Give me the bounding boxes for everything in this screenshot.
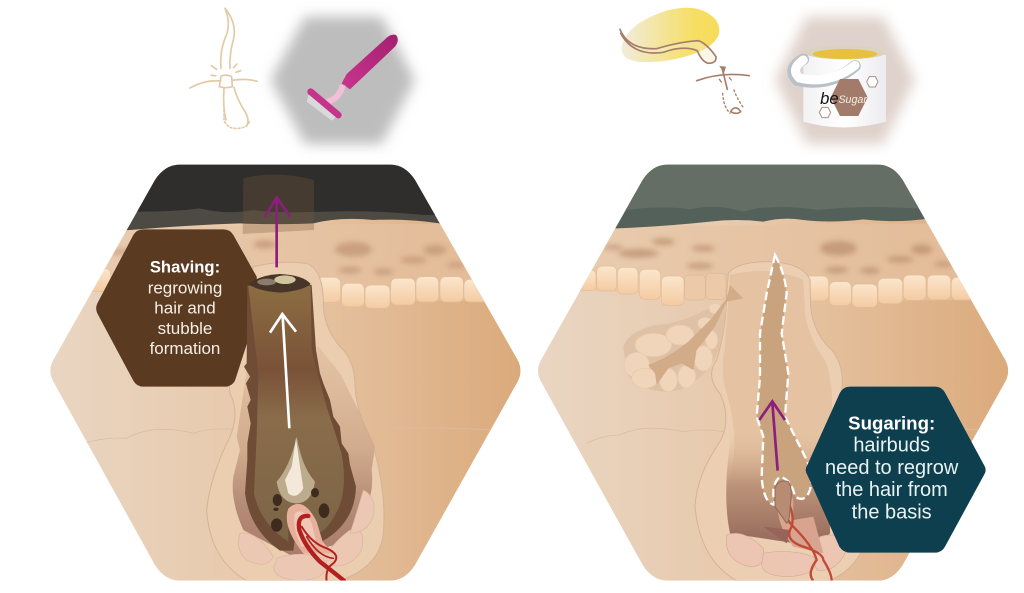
callout: sugaring: need to regrow <box>825 457 959 479</box>
callout: sugaring <box>806 387 986 553</box>
callout: shaving: stubble <box>158 319 212 338</box>
skin background <box>40 160 530 590</box>
icon: sugar paste pulling hair <box>620 8 749 113</box>
upper skin layer <box>580 223 980 302</box>
upper skin layer <box>107 223 490 302</box>
icon: cut hair <box>190 8 257 128</box>
fat lobes <box>238 490 374 581</box>
papilla remnant <box>778 496 824 554</box>
dermis boundary <box>587 428 983 443</box>
panel: shaving <box>40 160 530 590</box>
skin background <box>530 160 1020 590</box>
outer root sheath <box>233 347 375 557</box>
removed hair ghost dashed <box>757 255 811 505</box>
sebaceous gland <box>623 285 743 392</box>
faded cells <box>685 273 726 300</box>
callout: sugaring: hairbuds <box>853 435 930 457</box>
callout: shaving: Shaving: <box>150 258 220 277</box>
hair matrix <box>277 437 315 503</box>
dark surface <box>126 164 440 230</box>
callout: shaving: formation <box>150 339 220 358</box>
icon: besugar jar: Sugar <box>838 94 867 106</box>
fat lobes <box>726 533 847 577</box>
ghost stub <box>243 175 314 234</box>
hair: inner shaft <box>248 286 344 542</box>
callout: sugaring: the hair from <box>836 479 948 501</box>
blood vessels <box>788 505 833 581</box>
pigment patches <box>107 240 467 275</box>
callout: shaving <box>96 229 258 387</box>
hair: outer sheath <box>244 285 356 551</box>
follicle base <box>726 445 830 543</box>
papilla <box>287 504 333 553</box>
icon: besugar jar <box>775 17 915 144</box>
dark surface <box>615 164 925 228</box>
melanin spots <box>271 488 329 532</box>
blood vessels <box>299 516 344 582</box>
hair bud <box>775 481 791 523</box>
follicle <box>695 262 867 581</box>
top of cut hair <box>249 274 311 293</box>
follicle outline <box>207 262 384 581</box>
skin cells <box>90 268 487 308</box>
callout: sugaring: Sugaring: <box>848 412 935 433</box>
icon: besugar jar: be <box>820 89 839 108</box>
callout: shaving: regrowing <box>148 278 222 297</box>
follicle inner <box>723 271 832 459</box>
dermis boundary <box>83 428 493 443</box>
callout: shaving: hair and <box>154 299 216 318</box>
arrow: purple regrowth <box>759 401 785 471</box>
arrow: white growth <box>270 314 296 428</box>
callout: sugaring: the basis <box>852 501 932 523</box>
pigment patches <box>604 238 953 274</box>
icon: razor <box>271 17 415 144</box>
arrow: purple regrowth <box>265 197 290 267</box>
skin cells <box>573 266 975 307</box>
panel: sugaring <box>530 160 1020 590</box>
